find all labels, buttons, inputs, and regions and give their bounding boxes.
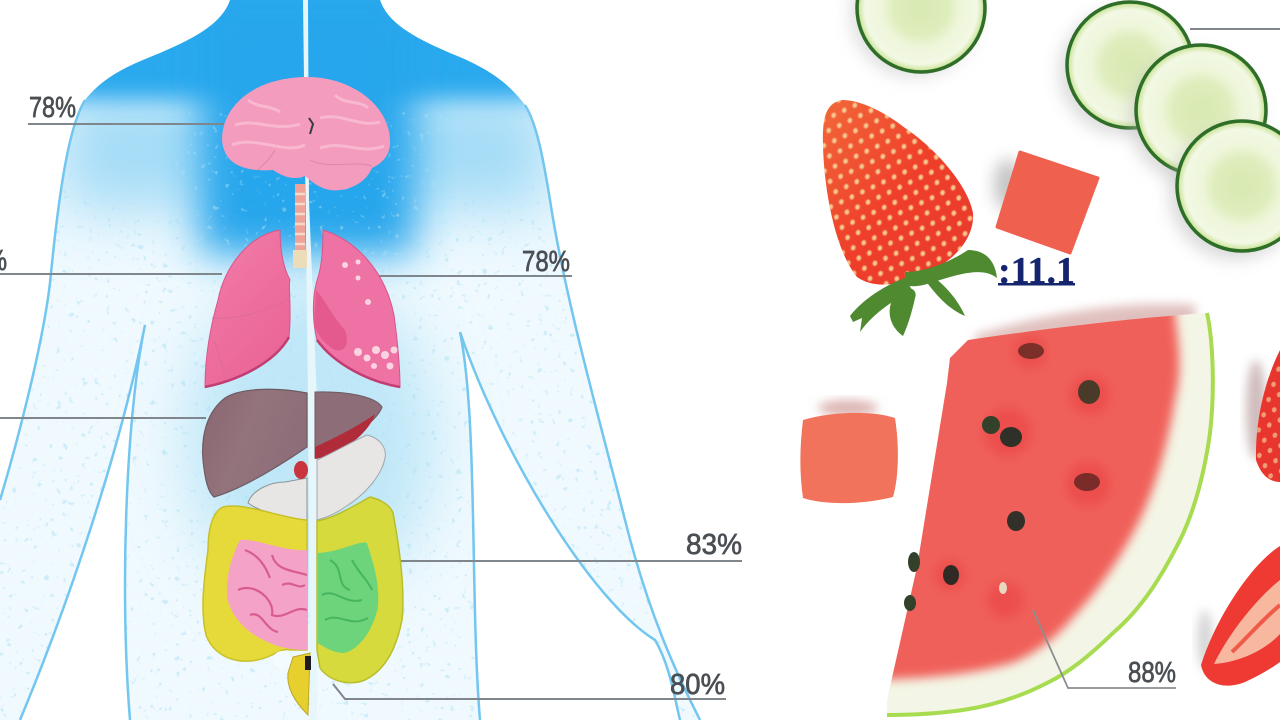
- panel: human body silhouette: [0, 0, 700, 720]
- label line: watermelon callout: [1033, 610, 1176, 688]
- icon: watermelon wedge: [860, 300, 1213, 715]
- label: lower percentage: 80%: [670, 669, 725, 701]
- icon: trachea: [293, 184, 307, 268]
- icon: strawberry half lower right: [1197, 546, 1280, 686]
- icon: liver right lobe: [315, 392, 382, 459]
- icon: cucumber slice 1: [1059, 2, 1193, 135]
- icon: cucumber slice 2: [1129, 45, 1266, 184]
- icon: watermelon cube left: [800, 400, 898, 503]
- label: garbled small blue text: :11.1: [998, 250, 1075, 292]
- icon: left lung: [205, 230, 290, 387]
- label: watermelon percentage: 88%: [1128, 657, 1176, 689]
- icon: watermelon cube top: [994, 152, 1098, 253]
- icon: cucumber slice 3: [1169, 121, 1280, 260]
- label: lungs percentage right: 78%: [522, 246, 570, 278]
- icon: large intestine: [203, 497, 403, 715]
- icon: stomach: [248, 435, 385, 520]
- label: brain percentage: 78%: [29, 92, 76, 124]
- icon: strawberry: [822, 100, 997, 336]
- icon: right lung: [313, 230, 400, 387]
- icon: strawberry edge right: [1246, 345, 1280, 485]
- icon: liver left lobe: [203, 389, 307, 497]
- icon: small intestine left: [227, 540, 307, 650]
- icon: brain: [222, 77, 390, 190]
- icon: cucumber slice top: [850, 0, 985, 78]
- icon: small intestine right: [318, 543, 378, 653]
- label: intestines percentage: 83%: [686, 529, 742, 561]
